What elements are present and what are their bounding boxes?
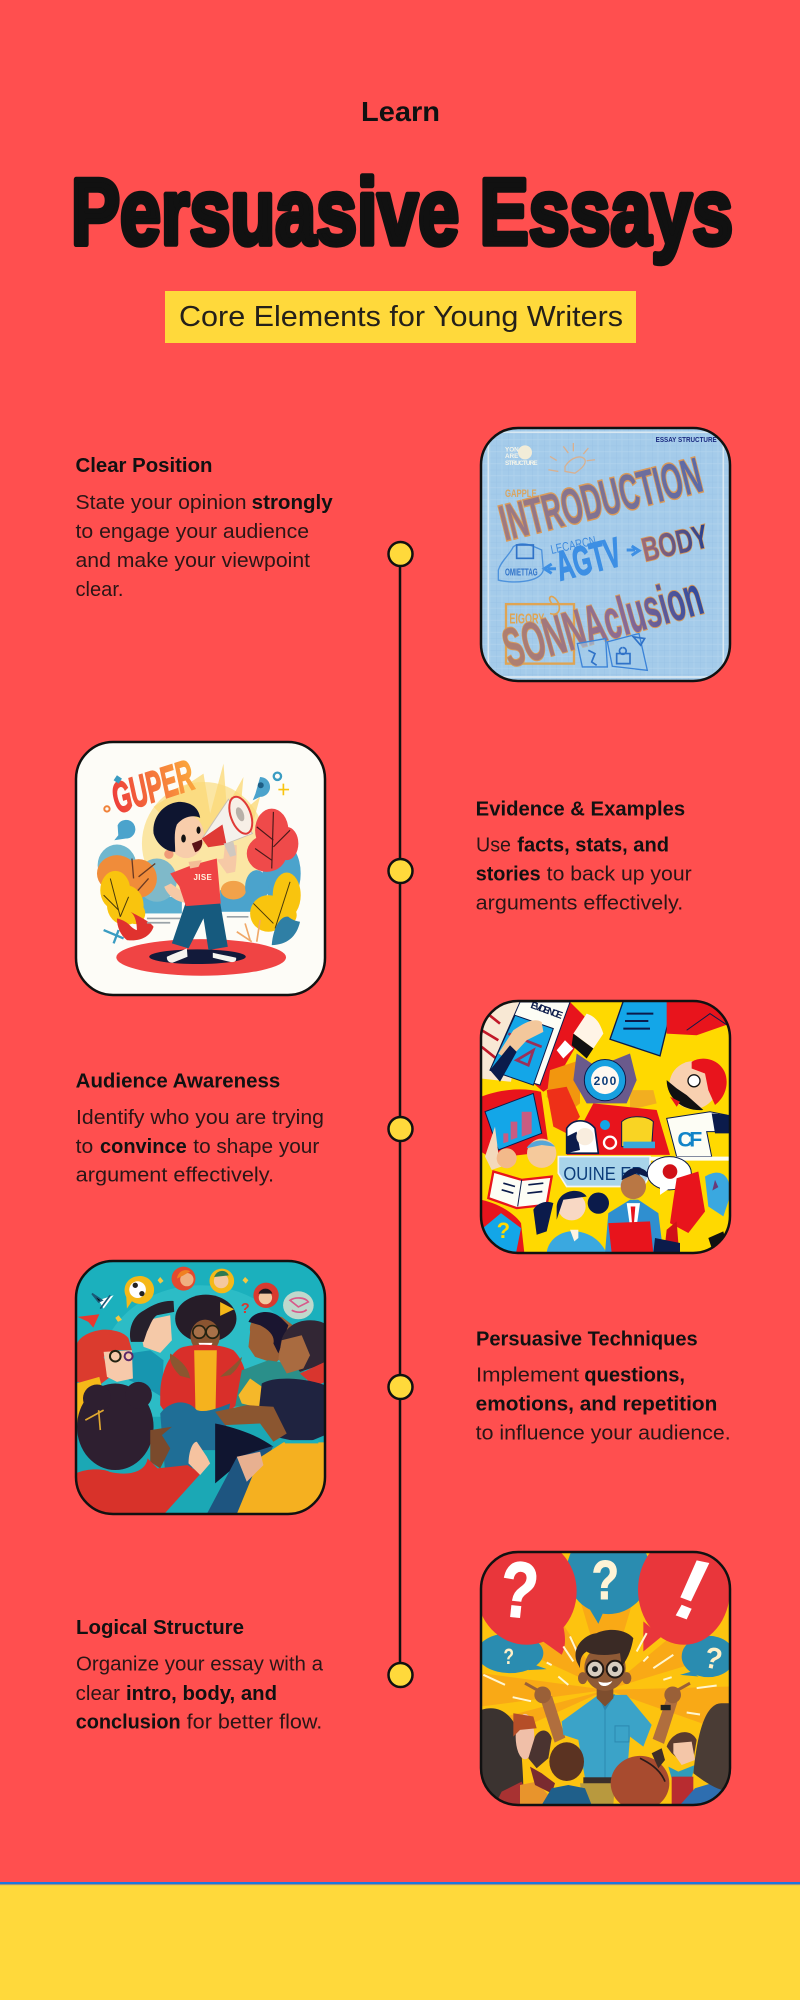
- panel: evidence and examples text: stories: [476, 864, 541, 886]
- panel: audience awareness text: to: [76, 1136, 93, 1158]
- panel: clear position text: clear.: [76, 579, 124, 601]
- panel: persuasive techniques text: emotions, and repetition: [476, 1394, 717, 1416]
- panel: audience awareness text: argument effectively.: [76, 1165, 274, 1187]
- eyebrow: Learn: Learn: [361, 96, 440, 127]
- illustration: essay structure blueprint: OMIETTAG: [505, 567, 538, 578]
- illustration: speaker with question bubbles: ?: [496, 1544, 542, 1636]
- panel: persuasive techniques text: Implement: [476, 1365, 579, 1387]
- panel: clear position text: Clear Position: [76, 455, 212, 477]
- panel: logical structure text: conclusion: [76, 1712, 181, 1734]
- panel: persuasive techniques text: questions,: [584, 1365, 685, 1387]
- panel: evidence and examples text: facts, stats, and: [517, 835, 669, 857]
- subtitle banner: [165, 291, 636, 343]
- panel: evidence and examples text: arguments effectively.: [476, 892, 683, 914]
- illustration: boy with megaphone: JISE: [194, 873, 212, 882]
- panel: audience awareness text: Identify who you are trying: [76, 1107, 324, 1129]
- illustration: speaker with question bubbles: ?: [503, 1644, 514, 1669]
- panel: logical structure text: for better flow.: [187, 1712, 322, 1734]
- illustration: evidence comic collage: 200: [594, 1074, 617, 1088]
- illustration: diverse audience circle: ?: [241, 1301, 250, 1317]
- panel: evidence and examples text: to back up your: [547, 864, 692, 886]
- illustration: essay structure blueprint: [481, 428, 730, 681]
- panel: persuasive techniques text: Persuasive Techniques: [476, 1329, 698, 1351]
- header: [71, 96, 733, 343]
- panel: logical structure text: [76, 1617, 324, 1734]
- panel: clear position text: State your opinion: [76, 492, 246, 514]
- panel: clear position text: to engage your audience: [76, 521, 309, 543]
- panel: audience awareness text: to shape your: [193, 1136, 320, 1158]
- illustration: speaker with question bubbles: ?: [701, 1641, 725, 1677]
- illustration: essay structure blueprint: ARE: [505, 453, 518, 460]
- illustration: evidence comic collage: ?: [497, 1218, 510, 1243]
- illustration: evidence comic collage: EVIDENCE: [529, 1000, 564, 1022]
- panel: persuasive techniques text: to influence your audience.: [476, 1422, 731, 1444]
- panel: audience awareness text: convince: [100, 1136, 187, 1158]
- panel: clear position text: and make your viewpoint: [76, 550, 310, 572]
- illustration: essay structure blueprint: LECARCN: [549, 534, 597, 557]
- panel: evidence and examples text: [476, 799, 692, 914]
- panel: logical structure text: Logical Structure: [76, 1617, 244, 1639]
- panel: clear position text: [76, 455, 334, 601]
- panel: evidence and examples text: Evidence & Examples: [476, 799, 685, 821]
- illustration: boy with megaphone: [76, 742, 325, 995]
- illustration: essay structure blueprint: GAPPLE: [505, 488, 537, 500]
- illustration: essay structure blueprint: YON: [505, 446, 519, 453]
- illustration: diverse audience circle: [76, 1261, 325, 1517]
- illustration: essay structure blueprint: AGTV: [551, 529, 626, 589]
- illustration: evidence comic collage: OUINE ER: [563, 1163, 643, 1184]
- timeline: [388, 542, 412, 1687]
- panel: persuasive techniques text: [476, 1329, 731, 1444]
- illustration: evidence comic collage: CF: [677, 1128, 702, 1152]
- footer band: [0, 1882, 800, 2000]
- panel: audience awareness text: [76, 1071, 324, 1187]
- panel: audience awareness text: Audience Awareness: [76, 1071, 280, 1093]
- panel: logical structure text: clear: [76, 1683, 120, 1705]
- panel: clear position text: strongly: [252, 492, 334, 514]
- illustration: essay structure blueprint: EIGORY: [509, 611, 544, 628]
- subtitle banner: Core Elements for Young Writers: [179, 301, 623, 333]
- panel: evidence and examples text: Use: [476, 835, 511, 857]
- illustration: evidence comic collage: [481, 1000, 730, 1253]
- panel: logical structure text: Organize your essay with a: [76, 1654, 324, 1676]
- illustration: speaker with question bubbles: ?: [592, 1549, 619, 1611]
- illustration: essay structure blueprint: ESSAY STRUCTURE: [656, 437, 717, 444]
- illustration: speaker with question bubbles: [480, 1550, 732, 1806]
- illustration: essay structure blueprint: STRUCTURE: [505, 460, 538, 467]
- panel: logical structure text: intro, body, and: [126, 1683, 277, 1705]
